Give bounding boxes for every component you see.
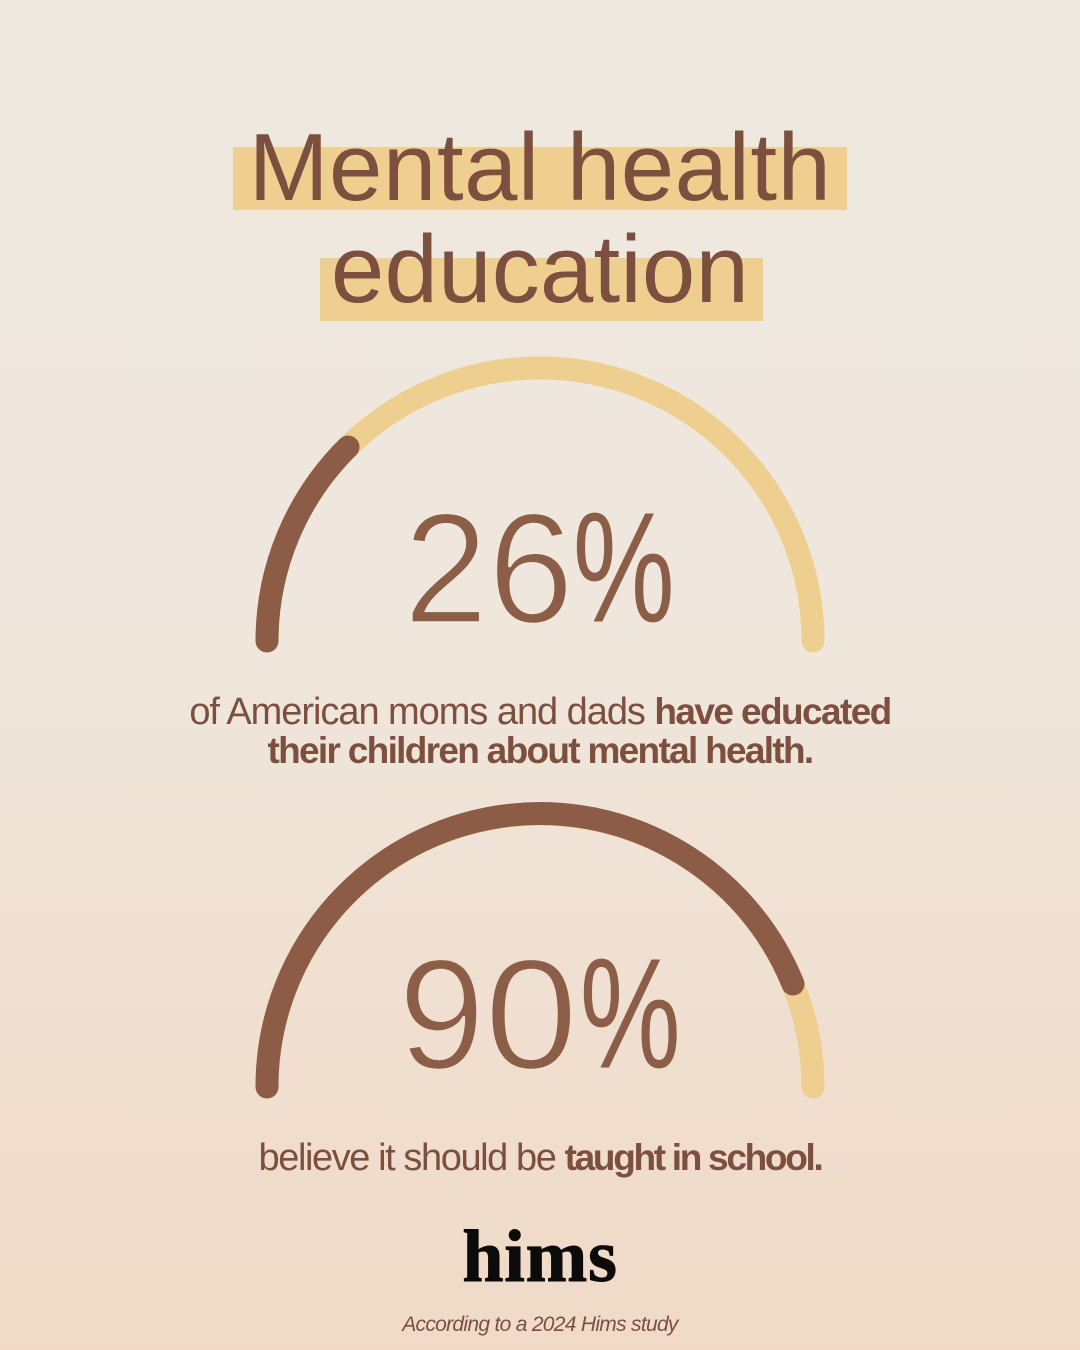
gauge track	[267, 368, 813, 641]
source note: According to a 2024 Hims study	[402, 1313, 678, 1336]
gauge value arc	[267, 814, 793, 1087]
description: 26%: their children about mental health.	[268, 730, 812, 770]
gauge track	[267, 814, 813, 1087]
gauge number: 9	[398, 928, 485, 1103]
title highlight: line 2	[320, 258, 763, 321]
title highlight: line 1	[233, 147, 847, 210]
description: 26%	[189, 691, 891, 770]
description: 26%: of American moms and dads have educated	[189, 691, 891, 733]
gauge number: 6	[488, 480, 574, 656]
gauge value arc	[267, 447, 348, 641]
gauge number: %	[580, 927, 681, 1102]
gauge number: %	[573, 481, 675, 656]
gauge number: 2	[404, 481, 488, 656]
gauge number	[404, 480, 675, 656]
gauge: 90%	[256, 802, 824, 1103]
description: 90%: believe it should be taught in school.	[259, 1137, 821, 1179]
title	[233, 114, 847, 323]
logo: hims: hims	[462, 1216, 618, 1298]
title text: line 1: Mental health	[249, 114, 831, 221]
gauge number: 0	[484, 928, 578, 1102]
gauge: 26%	[256, 356, 824, 656]
gauge number	[398, 927, 681, 1103]
title text: line 2: education	[331, 216, 749, 323]
